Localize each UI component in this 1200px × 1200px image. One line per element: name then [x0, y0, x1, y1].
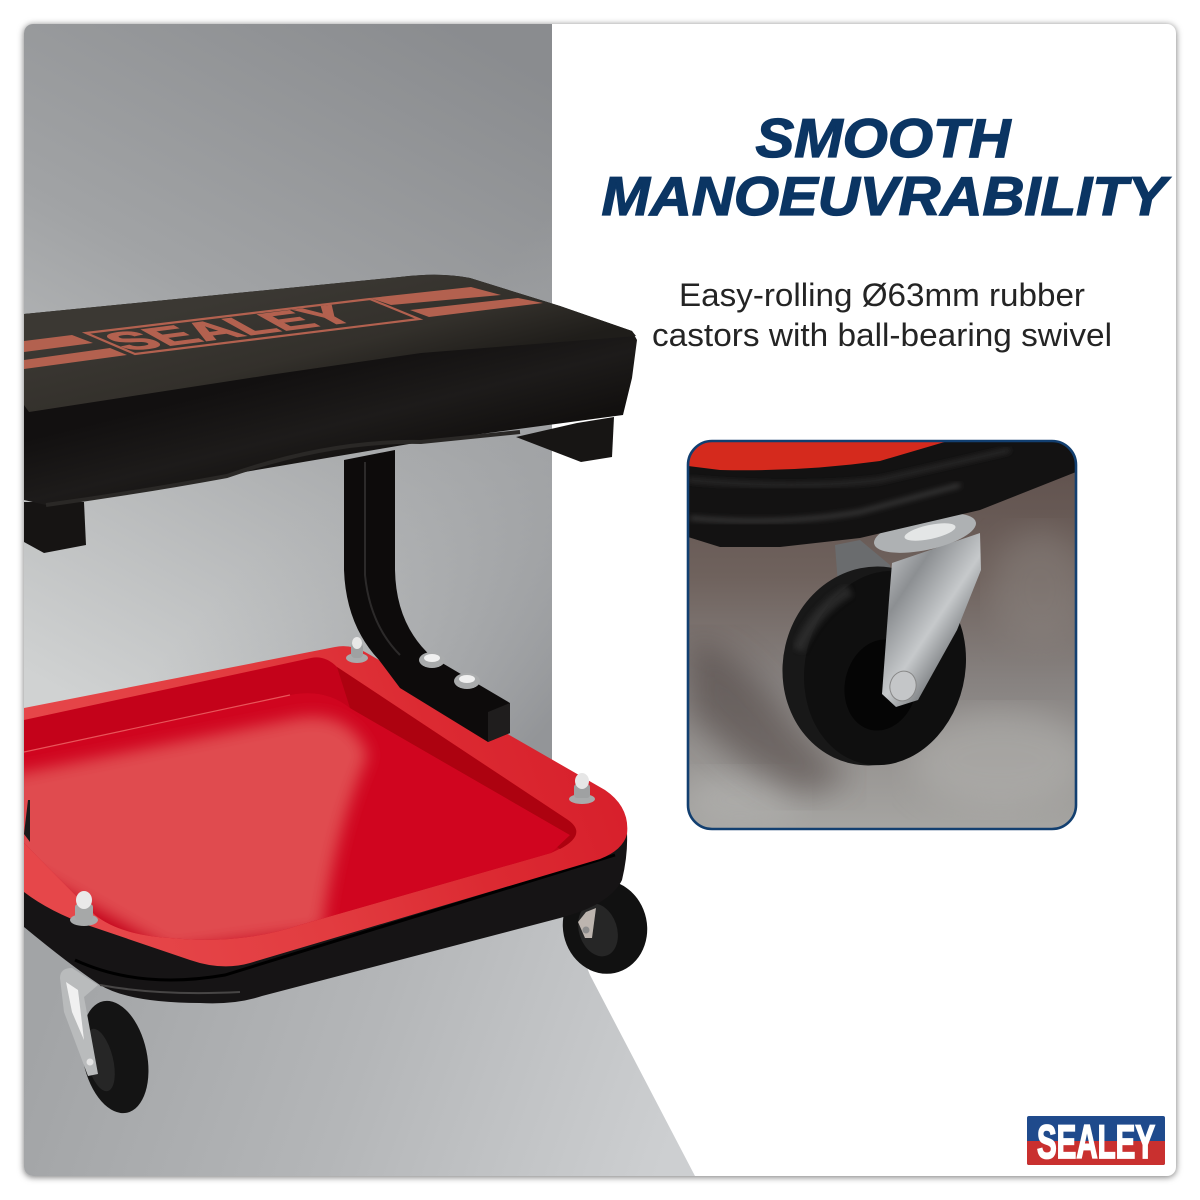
product photo: mechanic's creeper seat — [10, 275, 656, 1119]
seat logo box — [86, 299, 419, 354]
tray floor — [10, 693, 570, 950]
fixing bolts — [70, 637, 595, 926]
swivel fork — [882, 533, 981, 707]
near wheel and swivel fork — [60, 968, 148, 1114]
swivel head — [874, 514, 976, 553]
seat stripes — [24, 287, 543, 369]
description text — [652, 277, 1112, 353]
seat logo text: SEALEY — [91, 300, 369, 356]
rear fork plate — [835, 540, 890, 576]
black tray frame — [688, 441, 1076, 547]
red tool tray — [10, 646, 627, 1003]
padded seat cushion — [24, 275, 637, 505]
heading — [602, 107, 1171, 227]
tray rim — [24, 646, 627, 966]
black tray frame — [24, 833, 627, 1003]
heading: SMOOTH — [756, 107, 1012, 169]
inset border — [688, 441, 1076, 829]
seat support leg and bracket — [24, 417, 614, 742]
far wheel — [562, 884, 648, 974]
castor wheel — [782, 566, 966, 766]
red tray edge — [688, 441, 948, 470]
heading: MANOEUVRABILITY — [602, 165, 1171, 227]
inset photo: castor close-up — [680, 441, 1090, 830]
description text: Easy-rolling Ø63mm rubber — [679, 277, 1085, 313]
grey backdrop panel — [24, 24, 695, 1176]
tray recess wall — [24, 657, 576, 940]
concrete floor — [688, 441, 1076, 829]
description text: castors with ball-bearing swivel — [652, 317, 1112, 353]
